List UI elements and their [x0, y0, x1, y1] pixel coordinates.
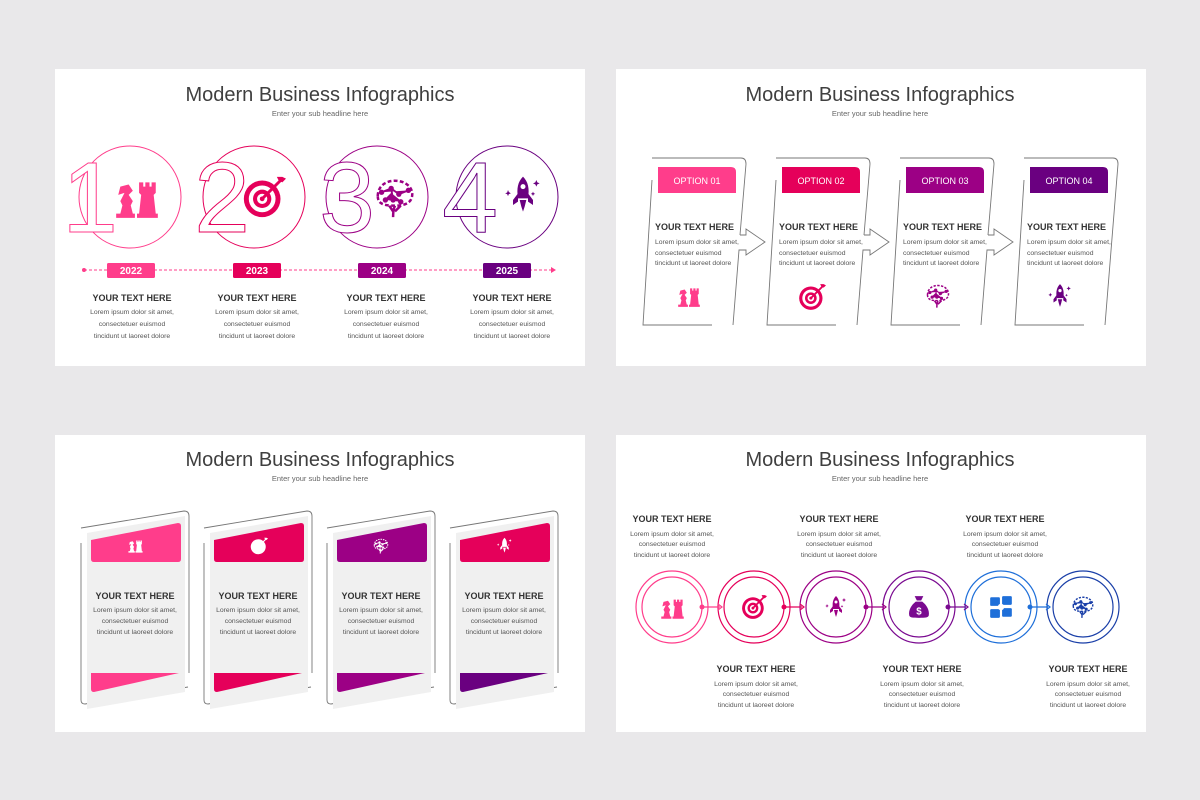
- bottom texts: [714, 664, 1130, 709]
- step texts: consectetuer euismod: [224, 321, 290, 328]
- step texts: tincidunt ut laoreet dolore: [94, 333, 170, 340]
- panel: circle process: [616, 435, 1146, 732]
- bottom texts: consectetuer euismod: [723, 691, 789, 698]
- year pills: 2025: [496, 266, 519, 277]
- step 3: [319, 142, 428, 254]
- option texts: consectetuer euismod: [655, 250, 722, 257]
- step texts: YOUR TEXT HERE: [217, 293, 297, 303]
- step texts: YOUR TEXT HERE: [472, 293, 552, 303]
- option icons: [678, 284, 1071, 310]
- title: Modern Business Infographics: [745, 84, 1015, 106]
- bottom texts: tincidunt ut laoreet dolore: [718, 702, 794, 709]
- panel: options 01-04: [616, 69, 1146, 366]
- panel: timeline 2022-2025: [55, 69, 585, 366]
- top texts: [630, 514, 1047, 559]
- cards: YOUR TEXT HERE: [464, 591, 544, 601]
- cards: tincidunt ut laoreet dolore: [466, 629, 542, 636]
- bottom texts: Lorem ipsum dolor sit amet,: [1046, 681, 1130, 688]
- cards: YOUR TEXT HERE: [95, 591, 175, 601]
- step texts: YOUR TEXT HERE: [346, 293, 426, 303]
- bottom texts: consectetuer euismod: [889, 691, 955, 698]
- option tabs: OPTION 01: [673, 176, 721, 186]
- cards: YOUR TEXT HERE: [341, 591, 421, 601]
- option tabs: OPTION 04: [1045, 176, 1093, 186]
- panel: tilted cards: [55, 435, 585, 732]
- top texts: YOUR TEXT HERE: [632, 514, 712, 524]
- step texts: YOUR TEXT HERE: [92, 293, 172, 303]
- top texts: Lorem ipsum dolor sit amet,: [797, 531, 881, 538]
- option tabs: OPTION 03: [921, 176, 969, 186]
- subtitle: Enter your sub headline here: [272, 109, 368, 118]
- step texts: [90, 293, 554, 340]
- step texts: Lorem ipsum dolor sit amet,: [90, 309, 174, 316]
- bottom texts: YOUR TEXT HERE: [716, 664, 796, 674]
- title: Modern Business Infographics: [185, 84, 455, 106]
- option texts: tincidunt ut laoreet dolore: [655, 260, 732, 267]
- option texts: Lorem ipsum dolor sit amet,: [655, 239, 739, 246]
- option texts: consectetuer euismod: [1027, 250, 1094, 257]
- cards: YOUR TEXT HERE: [218, 591, 298, 601]
- top texts: tincidunt ut laoreet dolore: [801, 552, 877, 559]
- option texts: Lorem ipsum dolor sit amet,: [1027, 239, 1111, 246]
- step texts: tincidunt ut laoreet dolore: [219, 333, 295, 340]
- subtitle: Enter your sub headline here: [832, 109, 928, 118]
- step 4: [442, 142, 558, 254]
- step 2: 2: [194, 142, 250, 254]
- option texts: Lorem ipsum dolor sit amet,: [779, 239, 863, 246]
- cards: Lorem ipsum dolor sit amet,: [339, 607, 423, 614]
- option texts: YOUR TEXT HERE: [1027, 222, 1106, 232]
- option tabs: [658, 167, 1108, 193]
- option texts: YOUR TEXT HERE: [779, 222, 858, 232]
- cards: consectetuer euismod: [102, 618, 168, 625]
- step 2: [194, 142, 305, 254]
- option texts: YOUR TEXT HERE: [655, 222, 734, 232]
- circles chain: [636, 571, 1119, 643]
- cards: tincidunt ut laoreet dolore: [343, 629, 419, 636]
- bottom texts: Lorem ipsum dolor sit amet,: [714, 681, 798, 688]
- option texts: consectetuer euismod: [779, 250, 846, 257]
- option texts: consectetuer euismod: [903, 250, 970, 257]
- cards: tincidunt ut laoreet dolore: [97, 629, 173, 636]
- step texts: consectetuer euismod: [99, 321, 165, 328]
- cards: Lorem ipsum dolor sit amet,: [462, 607, 546, 614]
- option texts: tincidunt ut laoreet dolore: [779, 260, 856, 267]
- timeline arrow: [82, 267, 556, 273]
- circle icons: [661, 595, 1093, 619]
- bottom texts: Lorem ipsum dolor sit amet,: [880, 681, 964, 688]
- step texts: tincidunt ut laoreet dolore: [474, 333, 550, 340]
- title: Modern Business Infographics: [745, 449, 1015, 471]
- cards: consectetuer euismod: [348, 618, 414, 625]
- step 1: 1: [62, 142, 118, 254]
- connectors: [700, 604, 1050, 610]
- option texts: tincidunt ut laoreet dolore: [1027, 260, 1104, 267]
- top texts: consectetuer euismod: [972, 541, 1038, 548]
- option texts: Lorem ipsum dolor sit amet,: [903, 239, 987, 246]
- bottom texts: tincidunt ut laoreet dolore: [884, 702, 960, 709]
- cards: Lorem ipsum dolor sit amet,: [216, 607, 300, 614]
- cards: tincidunt ut laoreet dolore: [220, 629, 296, 636]
- step 3: 3: [319, 142, 375, 254]
- option texts: YOUR TEXT HERE: [903, 222, 982, 232]
- cards: consectetuer euismod: [471, 618, 537, 625]
- bottom texts: YOUR TEXT HERE: [1048, 664, 1128, 674]
- cards: [81, 511, 558, 709]
- title: Modern Business Infographics: [185, 449, 455, 471]
- top texts: tincidunt ut laoreet dolore: [967, 552, 1043, 559]
- step 4: 4: [442, 142, 498, 254]
- bottom texts: consectetuer euismod: [1055, 691, 1121, 698]
- bottom texts: tincidunt ut laoreet dolore: [1050, 702, 1126, 709]
- top texts: Lorem ipsum dolor sit amet,: [963, 531, 1047, 538]
- top texts: consectetuer euismod: [806, 541, 872, 548]
- step texts: consectetuer euismod: [353, 321, 419, 328]
- option cards: [643, 158, 1118, 325]
- option texts: [655, 222, 1111, 267]
- cards: consectetuer euismod: [225, 618, 291, 625]
- subtitle: Enter your sub headline here: [832, 474, 928, 483]
- year pills: 2024: [371, 266, 394, 277]
- year pills: [107, 263, 531, 278]
- cards: Lorem ipsum dolor sit amet,: [93, 607, 177, 614]
- step texts: Lorem ipsum dolor sit amet,: [344, 309, 428, 316]
- step texts: consectetuer euismod: [479, 321, 545, 328]
- year pills: 2022: [120, 266, 143, 277]
- year pills: 2023: [246, 266, 269, 277]
- top texts: YOUR TEXT HERE: [965, 514, 1045, 524]
- step texts: Lorem ipsum dolor sit amet,: [215, 309, 299, 316]
- step texts: tincidunt ut laoreet dolore: [348, 333, 424, 340]
- step 1: [62, 142, 181, 254]
- bottom texts: YOUR TEXT HERE: [882, 664, 962, 674]
- top texts: YOUR TEXT HERE: [799, 514, 879, 524]
- step texts: Lorem ipsum dolor sit amet,: [470, 309, 554, 316]
- subtitle: Enter your sub headline here: [272, 474, 368, 483]
- top texts: Lorem ipsum dolor sit amet,: [630, 531, 714, 538]
- top texts: tincidunt ut laoreet dolore: [634, 552, 710, 559]
- option texts: tincidunt ut laoreet dolore: [903, 260, 980, 267]
- option tabs: OPTION 02: [797, 176, 845, 186]
- top texts: consectetuer euismod: [639, 541, 705, 548]
